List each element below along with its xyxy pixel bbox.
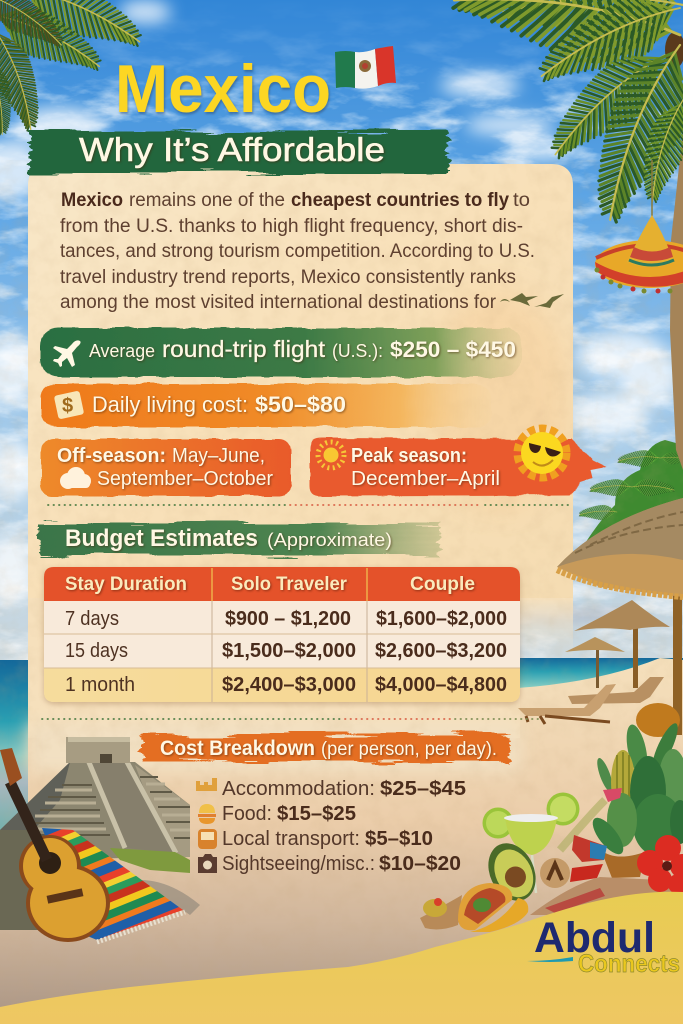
callout: daily living cost: Daily living cost: bbox=[92, 392, 248, 417]
item: sightseeing bbox=[198, 853, 461, 875]
icon: Mexican flag bbox=[335, 46, 396, 89]
table row: 7 days: $900 – $1,200 bbox=[225, 608, 351, 630]
divider dots bbox=[48, 504, 572, 506]
background: sky bbox=[0, 0, 683, 720]
item: food: Food: bbox=[222, 803, 272, 825]
list: cost breakdown bbox=[196, 778, 466, 875]
text block: intro: among the most visited international destinations for bbox=[60, 292, 497, 313]
illustration: margarita bbox=[482, 792, 580, 893]
text block: intro: tances, and strong tourism competition. According to U.S. bbox=[60, 241, 535, 262]
text block: intro: travel industry trend reports, Mexico consistently ranks bbox=[60, 267, 516, 288]
callout: off-season: May–June, bbox=[172, 445, 265, 467]
table header: Couple bbox=[410, 574, 475, 595]
bottom yellow wave bbox=[0, 892, 683, 1024]
icon: small sun bbox=[318, 442, 344, 468]
text block: intro: cheapest countries to fly bbox=[291, 190, 509, 211]
callout: peak season bbox=[310, 429, 607, 496]
callout: average flight: round-trip flight bbox=[162, 336, 326, 362]
icon: birds bbox=[500, 293, 564, 308]
text block: intro bbox=[60, 190, 535, 313]
item: sightseeing: $10–$20 bbox=[379, 853, 461, 875]
icon: cloud bbox=[60, 467, 91, 489]
icon: dollar note: $ bbox=[62, 395, 73, 417]
icon: dollar note bbox=[54, 391, 84, 419]
logo: Abdul Connects bbox=[527, 914, 680, 978]
callout: peak season: Peak season: bbox=[351, 445, 467, 467]
illustration: avocado bbox=[479, 836, 545, 908]
right background palm trees bbox=[579, 440, 683, 545]
heading banner: Why It's Affordable bbox=[30, 131, 448, 173]
item: sightseeing: Sightseeing/misc.: bbox=[222, 853, 375, 875]
palm: left bbox=[0, 0, 148, 136]
panel: main parchment card bbox=[28, 164, 573, 772]
table row: 1 month: $4,000–$4,800 bbox=[375, 674, 507, 696]
table row: 7 days bbox=[65, 608, 507, 630]
item: local transport bbox=[198, 828, 433, 850]
table header bbox=[65, 574, 475, 595]
title: Mexico bbox=[115, 51, 331, 127]
illustration: tacos bbox=[420, 883, 528, 932]
table row: 1 month: 1 month bbox=[65, 674, 135, 696]
text block: intro: remains one of the bbox=[129, 190, 285, 211]
illustration: guitar bbox=[0, 748, 110, 942]
callout: average flight: Average bbox=[89, 341, 155, 361]
item: local transport: Local transport: bbox=[222, 828, 360, 850]
table header: Solo Traveler bbox=[231, 574, 348, 595]
table row: 7 days: $1,600–$2,000 bbox=[376, 608, 507, 630]
text block: intro: to bbox=[513, 190, 530, 211]
item: accommodation: $25–$45 bbox=[380, 778, 466, 800]
straw hat bbox=[636, 703, 680, 737]
callout: average flight: $250 – $450 bbox=[390, 337, 516, 362]
sand beach background bbox=[0, 658, 683, 1024]
heading banner: Budget Estimates: (Approximate) bbox=[267, 530, 392, 550]
callout: off-season: September–October bbox=[97, 468, 273, 490]
heading banner: Cost Breakdown: (per person, per day). bbox=[321, 739, 497, 760]
icon: sun with sunglasses bbox=[518, 429, 566, 477]
umbrellas and loungers bbox=[518, 498, 683, 737]
table row: 15 days: $1,500–$2,000 bbox=[222, 640, 356, 662]
callout: average flight: (U.S.): bbox=[332, 341, 383, 361]
table: budget estimates bbox=[44, 567, 520, 702]
illustration: serape blanket bbox=[42, 828, 185, 942]
text block: intro: Mexico bbox=[61, 190, 123, 211]
callout: off-season bbox=[41, 439, 291, 496]
item: accommodation: Accommodation: bbox=[222, 778, 375, 800]
table row: 15 days bbox=[65, 640, 507, 662]
heading banner: Budget Estimates: Budget Estimates bbox=[65, 525, 258, 552]
text block: intro: from the U.S. thanks to high flight frequency, short dis- bbox=[60, 216, 523, 237]
callout: peak season: December–April bbox=[351, 468, 500, 490]
table row: 15 days: 15 days bbox=[65, 640, 128, 662]
heading banner: Why It's Affordable: Why It’s Affordable bbox=[79, 131, 385, 168]
item: food: $15–$25 bbox=[277, 803, 356, 825]
illustration: pyramid bbox=[0, 737, 200, 930]
icon: sombrero bbox=[594, 215, 683, 294]
logo: Abdul Connects: Abdul bbox=[534, 914, 655, 962]
table row: 1 month bbox=[65, 674, 507, 696]
palm: right bbox=[451, 0, 683, 470]
item: accommodation bbox=[196, 778, 466, 800]
heading banner: Budget Estimates bbox=[40, 523, 440, 555]
item: local transport: $5–$10 bbox=[365, 828, 433, 850]
table row: 15 days: $2,600–$3,200 bbox=[375, 640, 507, 662]
heading banner: Cost Breakdown: Cost Breakdown bbox=[160, 737, 315, 760]
background: sea bbox=[0, 658, 683, 835]
sun loungers bbox=[518, 677, 664, 724]
divider dots bbox=[42, 718, 540, 720]
callout: daily living cost bbox=[41, 384, 491, 427]
illustration: cactus and flower bbox=[530, 720, 683, 915]
icon: airplane bbox=[53, 340, 81, 367]
item: food bbox=[198, 803, 356, 825]
callout: off-season: Off-season: bbox=[57, 445, 166, 467]
table row: 1 month: $2,400–$3,000 bbox=[222, 674, 356, 696]
heading banner: Cost Breakdown bbox=[142, 734, 510, 762]
table row: 7 days: 7 days bbox=[65, 608, 119, 630]
callout: daily living cost: $50–$80 bbox=[255, 392, 346, 417]
callout: average flight bbox=[40, 328, 522, 377]
table header: Stay Duration bbox=[65, 574, 187, 595]
